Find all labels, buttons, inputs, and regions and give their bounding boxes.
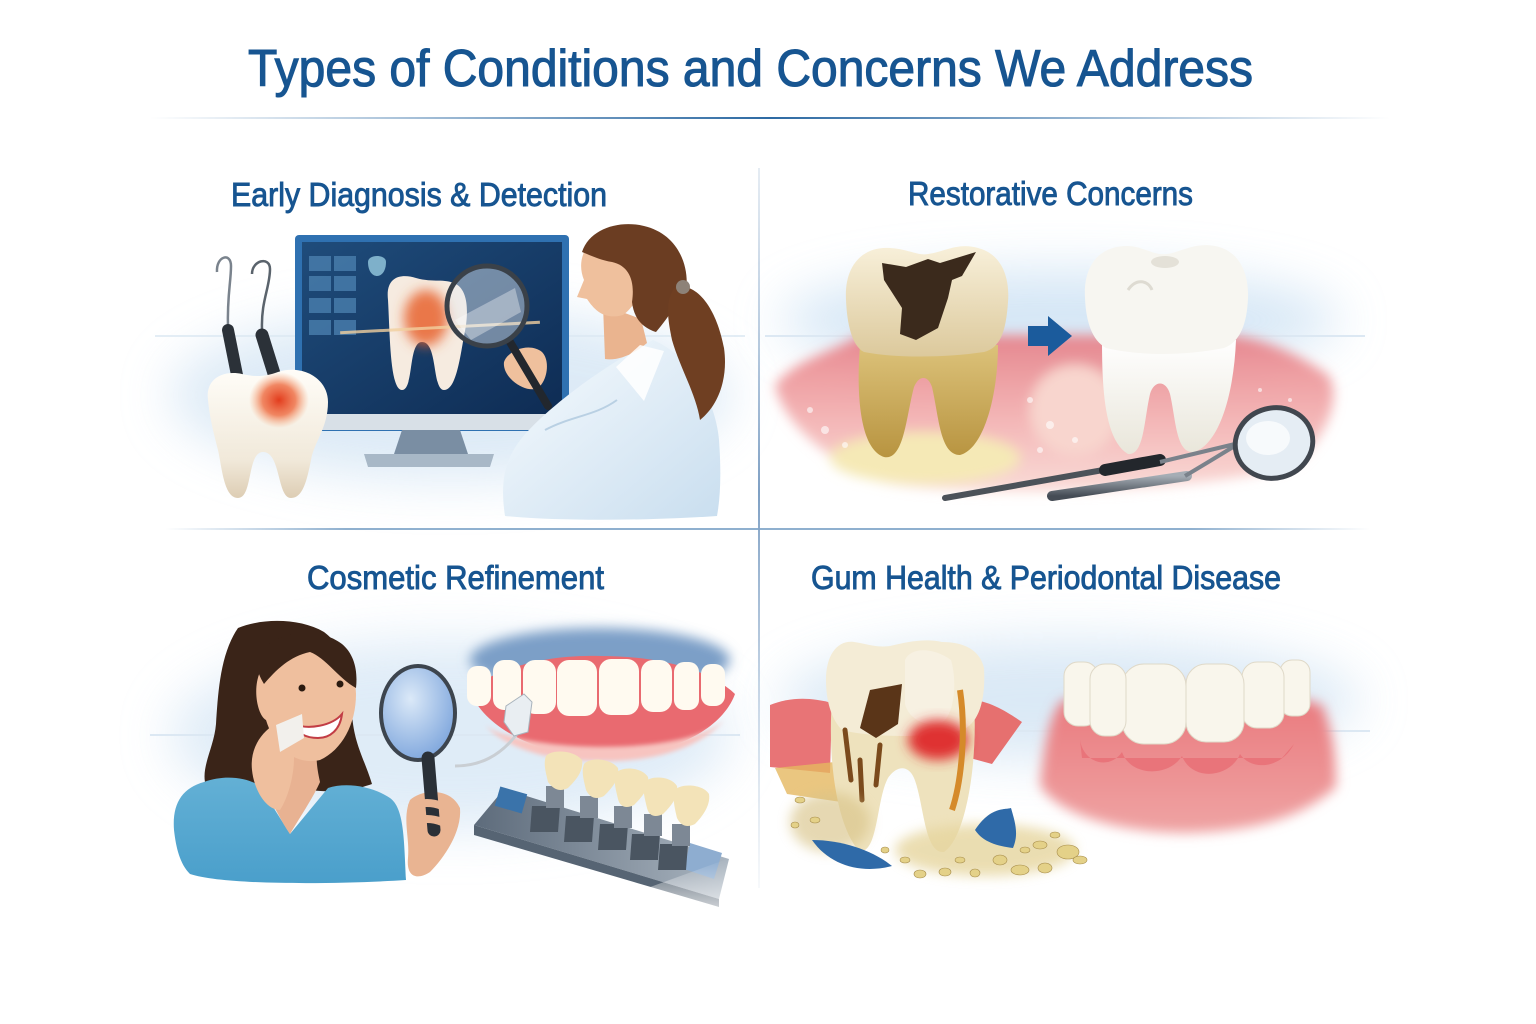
icon: decayed tooth <box>208 370 328 498</box>
panel glow <box>170 310 730 480</box>
icon: decayed tooth before treatment <box>846 246 1008 457</box>
gum tissue <box>775 335 1333 491</box>
woman with mirror <box>174 621 406 883</box>
heading: gum health: Gum Health & Periodontal Disease <box>811 559 1281 596</box>
panel: cosmetic refinement <box>150 559 740 908</box>
shade guide <box>474 751 730 908</box>
title: Types of Conditions and Concerns We Address <box>248 40 1253 98</box>
icon: diseased tooth <box>826 640 984 852</box>
panel: gum health and periodontal disease <box>770 559 1370 878</box>
panel: restorative concerns <box>765 175 1365 498</box>
vertical panel divider <box>758 168 760 888</box>
panel glow <box>780 640 1360 760</box>
horizontal panel divider <box>165 528 1370 530</box>
diseased gum <box>770 699 1022 802</box>
smile close-up <box>455 628 735 766</box>
panel glow <box>170 640 730 830</box>
heading: early diagnosis: Early Diagnosis & Detection <box>231 176 607 213</box>
icon: tartar debris <box>790 792 1087 878</box>
gum speckles <box>807 388 1292 453</box>
hand mirror <box>381 666 460 876</box>
icon: dental mirror and tools <box>945 399 1321 498</box>
heading: restorative concerns: Restorative Concerns <box>908 175 1193 212</box>
panel glow <box>780 270 1340 370</box>
title underline <box>150 117 1390 119</box>
monitor <box>295 235 569 467</box>
icon: healthy gum and teeth <box>1040 660 1336 833</box>
arrow <box>1028 316 1072 356</box>
dentist figure <box>503 224 725 520</box>
icon: dental probes <box>217 257 276 380</box>
icon: restored tooth <box>1085 245 1248 454</box>
magnifying glass <box>447 266 548 406</box>
heading: cosmetic refinement: Cosmetic Refinement <box>307 559 604 596</box>
panel: early diagnosis and detection <box>155 176 745 520</box>
